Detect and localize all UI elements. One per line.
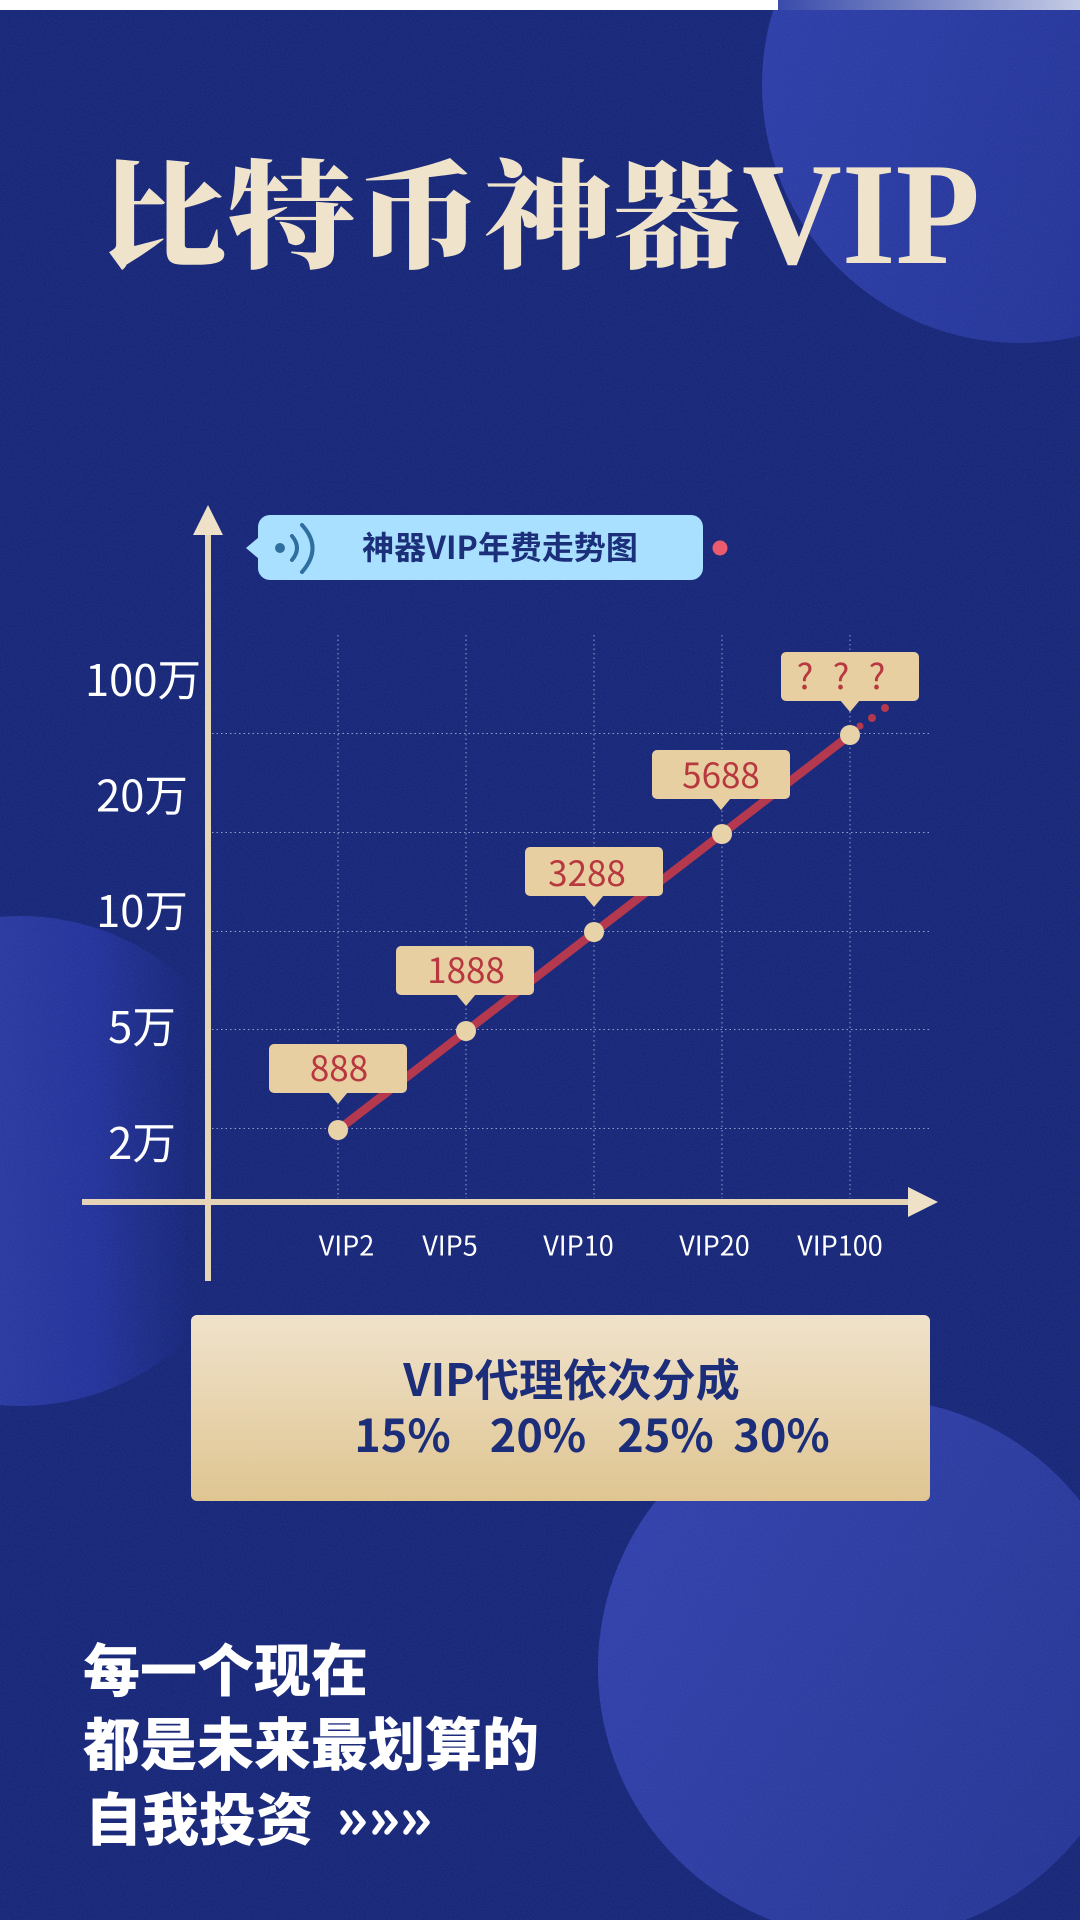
callout: 5688 (652, 748, 790, 810)
callout: 888: 888 (310, 1041, 368, 1092)
commission percentages: 15% (354, 1400, 451, 1465)
decorative circle: left (0, 916, 265, 1406)
callout: 1888 (396, 943, 534, 1006)
commission panel (191, 1315, 930, 1501)
closing slogan: 自我投资 (85, 1775, 313, 1857)
x axis labels: VIP5 (422, 1224, 478, 1264)
callout: unknown price: ? (797, 649, 813, 700)
chart title bubble: 神器VIP年费走势图 (362, 523, 638, 569)
closing slogan (83, 1626, 539, 1857)
commission percentages: 20% (490, 1400, 586, 1465)
y axis labels: 20万 (96, 762, 188, 824)
chart grid (212, 635, 931, 1198)
trend line (338, 704, 889, 1130)
y axis labels: 5万 (108, 993, 176, 1056)
callout: 888 (269, 1041, 407, 1104)
closing slogan: 每一个现在 (83, 1626, 368, 1708)
y axis labels (85, 646, 201, 1172)
y axis labels: 10万 (96, 877, 188, 940)
commission percentages (354, 1400, 830, 1465)
x axis labels (319, 1224, 883, 1264)
chart title bubble (246, 515, 703, 580)
title: 比特币神器 (98, 124, 741, 293)
commission percentages: 25% (617, 1400, 714, 1465)
icon: chevrons (343, 1813, 427, 1832)
x axis labels: VIP10 (543, 1224, 614, 1264)
callout: 3288 (525, 846, 663, 907)
data points (328, 725, 860, 1140)
icon: signal waves (275, 525, 312, 572)
decorative circle: top right (0, 0, 1080, 343)
x axis labels: VIP20 (679, 1224, 750, 1264)
commission panel: VIP代理依次分成 (402, 1345, 740, 1409)
decorative circle: bottom right (598, 1398, 1080, 1920)
x axis labels: VIP2 (319, 1224, 374, 1264)
y axis labels: 100万 (85, 646, 201, 709)
callout: 5688: 5688 (682, 748, 760, 799)
y axis labels: 2万 (108, 1109, 176, 1172)
y axis arrow (193, 505, 223, 1281)
red accent dot (712, 540, 728, 556)
x axis arrow (82, 1187, 938, 1217)
callout: unknown price: ? (869, 649, 885, 700)
commission percentages: 30% (733, 1400, 830, 1465)
x axis labels: VIP100 (797, 1224, 883, 1264)
closing slogan: 都是未来最划算的 (83, 1700, 539, 1782)
callout: unknown price: ? (833, 649, 849, 700)
callout: 3288: 3288 (548, 846, 626, 897)
callout: 1888: 1888 (427, 943, 505, 994)
title: VIP (742, 133, 980, 295)
callout: unknown price (781, 649, 919, 712)
